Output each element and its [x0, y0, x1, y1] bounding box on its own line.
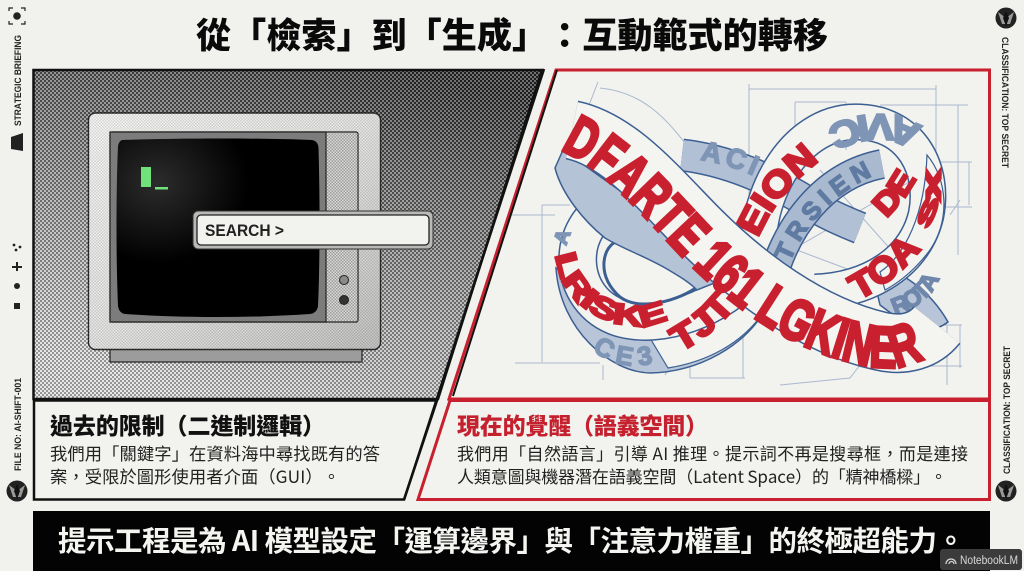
right ring: AVIC	[828, 113, 924, 148]
monitor base	[110, 345, 362, 362]
panel: past search terminal	[33, 69, 543, 399]
lettering: DFARTE 161 LGKINER	[560, 113, 926, 370]
back band upper	[680, 138, 866, 244]
panel: present text box	[418, 400, 990, 500]
label: classification top: CLASSIFICATION: TOP SECRET	[999, 37, 1010, 168]
knobs	[340, 276, 348, 304]
top ring band	[578, 205, 755, 321]
panel: present mobius strip	[447, 68, 991, 400]
body	[457, 440, 968, 488]
control column	[110, 132, 358, 322]
right sidebar	[996, 8, 1016, 502]
heading: 現在的覺醒（語義空間）	[457, 407, 708, 441]
label: file number: FILE NO: AI-SHIFT-001	[13, 377, 24, 471]
search bar: SEARCH >	[205, 221, 284, 240]
left ring: CE3	[594, 338, 652, 367]
search bar	[193, 211, 433, 249]
inner grey wall: TRSIEN	[774, 160, 872, 258]
right ring: DE	[870, 167, 918, 218]
icon: emblem bottom	[996, 480, 1016, 502]
divider line	[404, 69, 544, 500]
notebooklm badge: NotebookLM	[960, 555, 1018, 567]
body: 案，受限於圖形使用者介面（GUI）。	[50, 463, 340, 488]
left ring	[550, 209, 758, 374]
icon: folder	[11, 133, 23, 151]
lower wall	[556, 268, 765, 373]
left ring: A	[550, 227, 576, 248]
blueprint dimension lines	[512, 82, 972, 385]
right ring	[736, 103, 946, 304]
hole	[604, 239, 697, 304]
right ring: TOA	[844, 238, 923, 298]
band surface	[572, 130, 937, 343]
side wall right	[880, 155, 944, 290]
body	[50, 440, 380, 488]
white lower band	[650, 285, 765, 368]
icon: emblem	[6, 480, 28, 502]
panel: past text box	[34, 400, 437, 500]
screen	[116, 138, 320, 317]
body: 人類意圖與機器潛在語義空間（Latent Space）的「精神橋樑」。	[457, 463, 947, 488]
cursor	[141, 167, 168, 190]
lettering: EION	[736, 142, 819, 238]
back band lower right	[877, 275, 949, 328]
left ring: TJT	[666, 290, 731, 350]
halftone background	[33, 69, 543, 399]
panel frame	[449, 70, 990, 399]
panel frame	[34, 70, 542, 399]
left sidebar	[6, 8, 28, 502]
screen frame	[110, 132, 326, 322]
icon: small glyphs	[12, 244, 22, 309]
bottom banner: 提示工程是為 AI 模型設定「運算邊界」與「注意力權重」的終極超能力。	[58, 519, 965, 560]
underside wall	[555, 150, 722, 290]
icon: emblem top	[996, 8, 1016, 28]
label: classification bottom: CLASSIFICATION: TOP SECRET	[1002, 346, 1013, 474]
title: 從「檢索」到「生成」：互動範式的轉移	[196, 8, 828, 59]
bottom banner	[33, 511, 990, 571]
body: 我們用「關鍵字」在資料海中尋找既有的答	[50, 440, 380, 465]
lettering: LRISKE	[554, 251, 669, 329]
white outer ring	[758, 122, 928, 292]
monitor	[88, 113, 380, 350]
heading: 過去的限制（二進制邏輯）	[50, 407, 325, 441]
back band upper: ACIU	[700, 142, 760, 176]
body: 我們用「自然語言」引導 AI 推理。提示詞不再是搜尋框，而是連接	[457, 440, 968, 465]
back band lower right: ROTA	[890, 275, 941, 314]
label: strategic briefing: STRATEGIC BRIEFING	[13, 35, 24, 126]
notebooklm badge	[940, 549, 1022, 570]
icon: reticle	[9, 8, 25, 24]
main band	[554, 100, 960, 374]
bezel	[88, 113, 380, 350]
right ring: SX	[917, 166, 942, 229]
